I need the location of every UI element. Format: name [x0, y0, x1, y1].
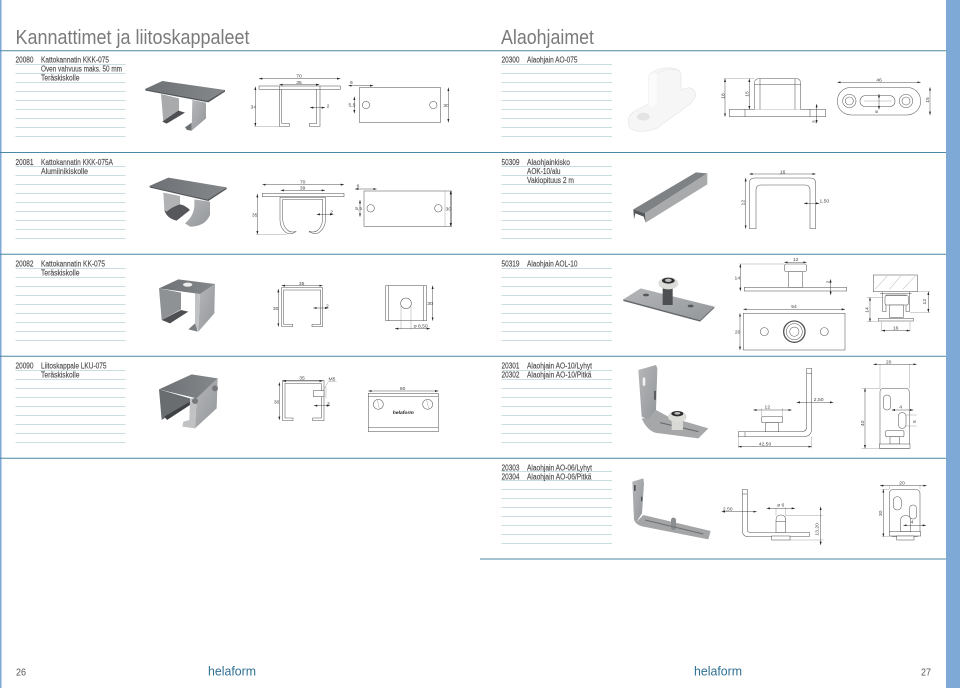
photo: AO-075 guide [628, 68, 696, 131]
drawing: LKU-075 plan: helaform [393, 410, 414, 416]
drawing: AOK-10 section: 1,50 [819, 199, 829, 205]
text: 20300: 20300 [502, 56, 520, 64]
middle-left drawings [273, 281, 438, 432]
text: 20300: Alaohjain AO-075 [527, 56, 578, 64]
drawing: AOL-10 mounting section: 12 [922, 299, 928, 304]
photo: AOK-10 rail [633, 172, 707, 223]
text: 50309: Vakiopituus 2 m [527, 176, 574, 185]
drawing: AO-06 front: 4 [911, 520, 914, 526]
drawing: KKK-075A plan: 5,5 [355, 206, 362, 212]
drawing: AO-075 side: 18 [720, 93, 726, 99]
drawing: KK-075 section: 30 [273, 306, 279, 312]
drawing: KKK-075A section: 39 [300, 186, 306, 192]
text: 20301 / 20302: 20302 [502, 370, 520, 380]
drawing: AO-06 front [878, 480, 927, 540]
title: left page: Kannattimet ja liitoskappaleet [16, 27, 250, 49]
drawing: KK-075 section: 2 [326, 304, 329, 310]
text: 20300 [502, 56, 578, 64]
drawing: KKK-075 section [251, 74, 340, 126]
drawing: KKK-075A plan: 30 [446, 206, 451, 212]
drawing: LKU-075 section: 35 [299, 375, 305, 381]
drawing: LKU-075 section: 2 [327, 401, 330, 407]
drawing: AO-10 front: 40 [860, 420, 866, 426]
text: 20303 / 20304: Alaohjain AO-06/Pitkä [527, 472, 592, 482]
drawing: AO-10 front [860, 359, 918, 448]
drawing: AOK-10 section: 16 [780, 169, 786, 175]
drawing: LKU-075 section [274, 375, 337, 421]
drawing: AO-075 top: 15 [925, 97, 931, 103]
text: 50319: Alaohjain AOL-10 [527, 260, 578, 268]
drawing: KKK-075A section: 2 [330, 209, 333, 215]
right page edge bar [946, 0, 960, 688]
text: 20081: Alumiinikiskolle [41, 167, 88, 176]
drawing: AO-075 top [837, 77, 931, 115]
photo: LKU-075 connector [159, 374, 218, 428]
text: 20303 / 20304: 20303 [502, 464, 520, 472]
drawing: AOL-10 side [735, 257, 847, 295]
text: 50309 [502, 158, 574, 185]
text: 20082: 20082 [16, 260, 34, 268]
bottom-right drawings [722, 480, 927, 545]
drawing: AO-10 front: 4 [899, 404, 902, 410]
text: 20080: Oven vahvuus maks. 50 mm [41, 64, 122, 74]
ruled lines right column [502, 64, 612, 544]
drawing: AO-075 side [720, 79, 826, 123]
photo: AO-10 guide [638, 365, 708, 438]
left page edge bar [0, 0, 2, 688]
text: 20082: Teräskiskolle [41, 268, 80, 278]
text: 50319 [502, 260, 578, 268]
photo: KKK-075 bracket [145, 81, 225, 131]
ruled lines left column [16, 64, 126, 442]
drawing: AOL-10 side: 12 [793, 257, 799, 263]
text: 20081 [16, 158, 114, 176]
text: 20080 [16, 56, 122, 82]
drawing: KK-075 section: 35 [299, 281, 305, 287]
drawing: AO-10 side: 2,50 [814, 397, 824, 403]
footer: page number 27: 27 [921, 668, 931, 678]
text: 50309: 50309 [502, 158, 520, 167]
text: 20090: 20090 [16, 362, 34, 370]
upper-left drawings [251, 74, 452, 234]
text: 50309: AOK-10/alu [527, 167, 560, 176]
text: 20090: Teräskiskolle [41, 370, 80, 380]
drawing: AO-10 side: 42,50 [759, 441, 771, 447]
text: 50309: Alaohjainkisko [527, 158, 570, 167]
drawing: KKK-075 section: 70 [296, 74, 302, 80]
drawing: AO-075 top: 6 [874, 110, 880, 113]
middle-right drawings [735, 257, 930, 448]
text: 20080: Teräskiskolle [41, 74, 80, 82]
drawing: AO-10 side: 12 [765, 405, 770, 411]
text: 20080: 20080 [16, 56, 34, 64]
drawing: AOL-10 top [735, 304, 845, 350]
drawing: AO-075 side: 3 [812, 120, 818, 123]
drawing: LKU-075 section: 30 [274, 399, 280, 405]
drawing: AOL-10 top: 20 [735, 329, 741, 335]
text: 20303 / 20304 [502, 464, 593, 482]
drawing: KK-075 section [273, 281, 329, 327]
text: 20301 / 20302 [502, 362, 593, 380]
title: right page: Alaohjaimet [501, 27, 594, 49]
drawing: KKK-075 plan: 5,5 [349, 103, 356, 109]
photo: AO-06 guide [632, 478, 711, 539]
drawing: KKK-075 section: 2 [327, 103, 330, 109]
drawing: KKK-075A plan: 6 [357, 183, 360, 189]
photo: KKK-075A bracket [149, 178, 227, 227]
text: 20081: 20081 [16, 158, 34, 167]
drawing: LKU-075 section: M5 [329, 377, 336, 383]
drawing: AOL-10 side: 14 [735, 275, 740, 281]
drawing: AO-075 top: 46 [876, 77, 882, 83]
drawing: AOL-10 side: 2 [826, 280, 832, 283]
section divider lines [0, 51, 946, 559]
text: 20090 [16, 362, 107, 380]
text: 50319: 50319 [502, 260, 520, 268]
drawing: AO-06 side: ⌀ 6 [777, 503, 784, 509]
drawing: KK-075 plan: 30 [427, 301, 433, 307]
photo: AOL-10 guide [623, 277, 714, 322]
drawing: AO-10 front: 20 [886, 359, 892, 365]
drawing: AOL-10 mounting section: 14 [864, 307, 870, 313]
text: 20301 / 20302: 20301 [502, 362, 520, 370]
drawing: AOL-10 mounting section [864, 275, 930, 332]
drawing: AO-06 front: 20 [899, 480, 905, 486]
drawing: KK-075 plan: ⌀ 8,50 [414, 323, 428, 329]
upper-right product row [628, 68, 931, 229]
drawing: KKK-075A section [252, 180, 344, 234]
drawing: AOL-10 top: 54 [791, 304, 797, 310]
drawing: KK-075 plan [386, 286, 433, 329]
drawing: KKK-075 section: 34 [251, 104, 256, 110]
drawing: LKU-075 plan: 60 [400, 386, 406, 392]
drawing: KKK-075 section: 35 [296, 80, 302, 86]
drawing: LKU-075 plan [368, 386, 438, 432]
text: 20303 / 20304: Alaohjain AO-06/Lyhyt [527, 464, 593, 472]
drawing: KKK-075A section: 70 [300, 180, 306, 186]
drawing: AOK-10 section [740, 169, 829, 229]
text: 20080: Kattokannatin KKK-075 [41, 56, 109, 64]
drawing: AO-06 side: 2,50 [723, 506, 733, 512]
drawing: AO-075 side: 15 [744, 91, 750, 97]
text: 20090: Liitoskappale LKU-075 [41, 362, 107, 370]
drawing: AOK-10 section: 12 [740, 200, 746, 205]
drawing: KKK-075 plan [348, 80, 449, 122]
text: 20303 / 20304: 20304 [502, 472, 520, 482]
text: 20301 / 20302: Alaohjain AO-10/Lyhyt [527, 362, 593, 370]
drawing: KKK-075 plan: 6 [350, 80, 353, 86]
drawing: AO-10 side [738, 368, 833, 448]
drawing: AO-06 side: 13,20 [814, 523, 820, 536]
drawing: KKK-075A plan [355, 183, 452, 226]
drawing: AOL-10 mounting section: 16 [893, 326, 899, 332]
text: 20082: Kattokannatin KK-075 [41, 260, 105, 268]
text: 20301 / 20302: Alaohjain AO-10/Pitkä [527, 370, 592, 380]
drawing: KKK-075A section: 35 [252, 213, 258, 219]
text: 20081: Kattokannatin KKK-075A [41, 158, 114, 167]
footer: helaform logo right: helaform [694, 664, 742, 678]
drawing: AO-10 front: 5 [912, 420, 918, 423]
footer: page number 26: 26 [16, 668, 26, 678]
drawing: AO-06 side [722, 489, 823, 545]
drawing: AO-06 front: 30 [878, 510, 884, 516]
photo: KK-075 bracket [159, 279, 215, 332]
footer: helaform logo left: helaform [208, 664, 256, 678]
text: 20082 [16, 260, 105, 278]
drawing: KKK-075 plan: 30 [443, 103, 449, 109]
